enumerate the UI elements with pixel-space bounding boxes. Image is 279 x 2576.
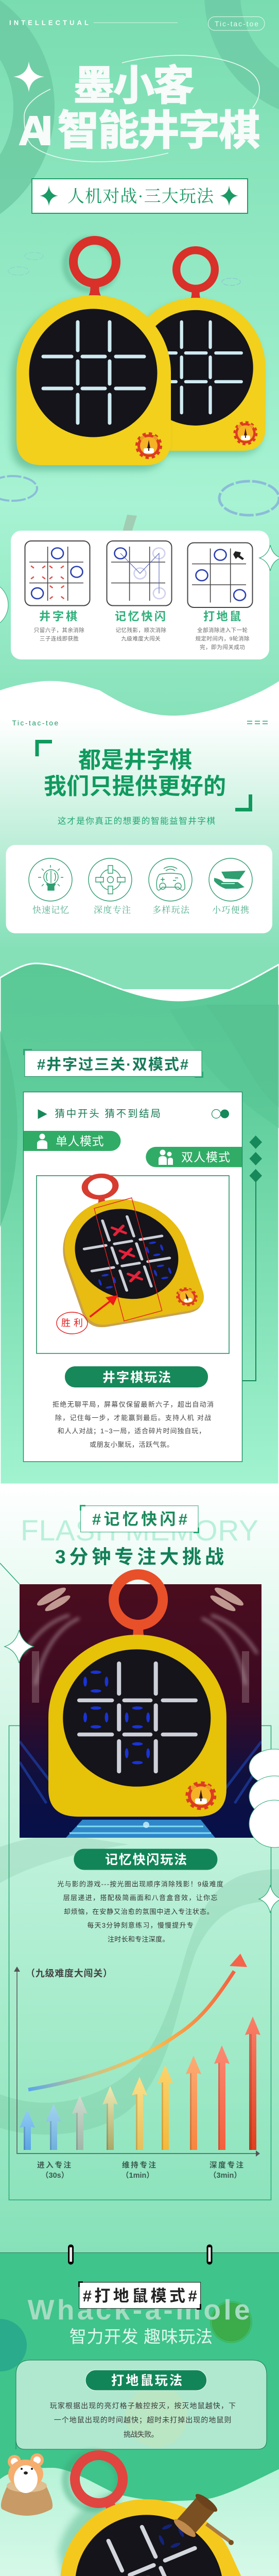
- photo: tilted board with winning line: [37, 1174, 229, 1353]
- icon: flash memory diagram: [107, 541, 172, 606]
- heading: 3分钟专注大挑战: 3分钟专注大挑战: [55, 1547, 224, 1567]
- button: 井字棋玩法: [65, 1366, 208, 1387]
- timeline decoration: [242, 1136, 262, 1381]
- axis labels: [37, 2161, 244, 2180]
- section: intro background wave: [0, 681, 279, 989]
- title: 墨小客 AI智能井字棋: [19, 63, 260, 154]
- text: tic-tac-toe rules: 拒绝无聊平局，屏幕仅保留最新六子，超出自动消: [53, 1400, 214, 1409]
- product photo: front game board: [11, 240, 171, 470]
- button: 打地鼠玩法: [85, 2370, 207, 2391]
- button: 打地鼠玩法: 打地鼠玩法: [111, 2374, 182, 2388]
- text: mode descriptions: 只留六子，其余消除: [34, 626, 84, 634]
- text: flash memory rules: 注时长和专注深度。: [108, 1935, 169, 1943]
- icon: toggle: [212, 1110, 229, 1118]
- pill: Tic-tac-toe: [208, 16, 265, 30]
- tag: 井字过三关·双模式: [23, 1049, 203, 1078]
- section: tic-tac-toe mode background: [0, 963, 279, 1484]
- text: flash memory rules: 光与影的游戏---按光圈出现顺序消除残影！9级难度: [57, 1880, 223, 1888]
- text: mode descriptions: 规定时间内，9轮消除: [196, 635, 250, 642]
- photo: arcade background: [20, 1584, 261, 1838]
- text: rules: [50, 2402, 236, 2438]
- ghost text: FLASH MEMORY: FLASH MEMORY: [21, 1514, 258, 1547]
- light wave stage: [0, 2468, 279, 2576]
- illustration: hamster in pot: [1, 2453, 53, 2516]
- icon: white sparkle: [13, 61, 44, 92]
- text: rules: 玩家根据出现的亮灯格子触控按灭，按灭地鼠越快，下: [50, 2402, 236, 2410]
- text: flash memory rules: [57, 1880, 223, 1943]
- text: tagline: 猜中开头 猜不到结局: [55, 1108, 161, 1120]
- chart title: （九级难度大闯关）: [26, 1968, 112, 1978]
- tag: 打地鼠模式: [78, 2281, 201, 2310]
- axis labels: （1min）: [121, 2171, 154, 2180]
- tag: 记忆快闪: [80, 1505, 199, 1533]
- pill: 单人模式: 单人模式: [56, 1134, 104, 1148]
- text: rules: 挑战失败。: [124, 2430, 159, 2438]
- text: mode descriptions: 三子连线即获胜: [40, 635, 79, 642]
- ghost text: Whack-a-mole: Whack-a-mole: [28, 2294, 250, 2326]
- text: flash memory rules: 每天3分钟刻意练习，慢慢提升专: [87, 1922, 194, 1929]
- axis labels: （30s）: [41, 2171, 68, 2180]
- icon: hand holding device: [209, 858, 252, 901]
- panel: tic-tac-toe card: [24, 1092, 242, 1462]
- axis labels: 进入专注: [37, 2161, 71, 2170]
- product photo: rear game board: [124, 250, 266, 455]
- icon: tic-tac-toe diagram: [25, 541, 90, 606]
- text: Tic-tac-toe label: Tic-tac-toe: [12, 719, 58, 727]
- decorative side bump and sparkle: [0, 545, 279, 629]
- text: tic-tac-toe rules: 除，记住每一步，才能赢到最后。支持人机 对战: [55, 1414, 211, 1422]
- pill: 双人模式: 双人模式: [181, 1150, 230, 1164]
- text: mode descriptions: 完，即为闯关成功: [200, 644, 245, 650]
- heading with brackets: [35, 740, 252, 811]
- subheading: 这才是你真正的想要的智能益智井字棋: [58, 816, 215, 826]
- heading with brackets: 我们只提供更好的: [44, 774, 226, 799]
- level arrows: [20, 2016, 260, 2150]
- clips: [71, 2247, 210, 2262]
- top label: INTELLECTUAL: INTELLECTUAL: [9, 19, 89, 27]
- decorative swoosh around title: [24, 55, 259, 162]
- growth curve arrow: [28, 1954, 247, 2090]
- photo: tilted board with winning line: 胜利: [61, 1318, 83, 1328]
- icon: play triangle: [38, 1109, 47, 1119]
- labels: mode names: 井字棋: [39, 610, 77, 623]
- text: tic-tac-toe rules: [53, 1400, 214, 1449]
- text: mode descriptions: 九级难度大闯关: [121, 635, 161, 642]
- frame around memory block: [0, 1563, 271, 2200]
- pill: 单人模式: [24, 1131, 121, 1151]
- tag: 记忆快闪: #记忆快闪#: [92, 1511, 187, 1528]
- panel: four feature icons: [6, 845, 272, 934]
- product: whack-a-mole board: [31, 2448, 275, 2576]
- subheading: 智力开发 趣味玩法: 智力开发 趣味玩法: [69, 2327, 213, 2346]
- labels: mode names: [39, 610, 241, 623]
- axis labels: （3min）: [209, 2171, 241, 2180]
- section: hero background: [0, 0, 279, 721]
- icon: whack-a-mole diagram: [187, 543, 252, 607]
- button: 记忆快闪玩法: [74, 1849, 217, 1870]
- text: flash memory rules: 却烦恼，在安静又治愈的氛围中进入专注状态。: [64, 1908, 214, 1916]
- labels: mode names: 打地鼠: [203, 610, 241, 623]
- chart: nine-level difficulty: [14, 1954, 260, 2180]
- text: tic-tac-toe rules: 和人人对战；1~3一局，适合碎片时间独自玩，: [58, 1427, 205, 1435]
- heading with brackets: 都是井字棋: [78, 748, 192, 773]
- labels: features: 深度专注: [94, 905, 131, 915]
- icon: game controller: [149, 858, 192, 901]
- button: 记忆快闪玩法: 记忆快闪玩法: [105, 1853, 187, 1867]
- section: whack-a-mole background: [0, 2252, 279, 2576]
- text: flash memory rules: 层层递进，搭配极简画面和八音盒音效，让你忘: [63, 1894, 217, 1902]
- panel: three game modes: [11, 531, 269, 659]
- panel: whack-a-mole rules: [16, 2360, 267, 2449]
- labels: features: 小巧便携: [212, 905, 249, 915]
- axes: [14, 1967, 260, 2157]
- labels: features: 多样玩法: [152, 905, 190, 915]
- axis labels: 维持专注: [122, 2161, 156, 2170]
- tag: 井字过三关·双模式: #井字过三关·双模式#: [37, 1056, 188, 1073]
- title: 墨小客 AI智能井字棋: 智能井字棋: [58, 108, 260, 154]
- section: flash memory background: [0, 1484, 279, 2253]
- decorative dashed rings: [0, 252, 279, 515]
- pill: Tic-tac-toe: Tic-tac-toe: [215, 20, 258, 28]
- pill: 双人模式: [146, 1147, 242, 1167]
- mark: three equals: [247, 721, 268, 724]
- title: 墨小客 AI智能井字棋: 墨小客: [74, 63, 194, 109]
- banner: 人机对战·三大玩法: [32, 179, 248, 213]
- banner: 人机对战·三大玩法: 人机对战·三大玩法: [67, 187, 214, 206]
- icon: brain bulb: [29, 858, 72, 901]
- text: mode descriptions: [34, 626, 250, 650]
- axis labels: 深度专注: [210, 2161, 244, 2170]
- text: mode descriptions: 全部消除进入下一轮: [197, 626, 248, 634]
- text: rules: 一个地鼠出现的时间越快；超时未打掉出现的地鼠则: [54, 2416, 231, 2425]
- text: tic-tac-toe rules: 或朋友小聚玩，活跃气氛。: [90, 1440, 173, 1449]
- button: 井字棋玩法: 井字棋玩法: [102, 1370, 171, 1385]
- labels: features: [32, 905, 249, 915]
- icon: hammer on board: [172, 2492, 234, 2545]
- labels: features: 快速记忆: [32, 905, 69, 915]
- text: mode descriptions: 记忆残影，顺次消除: [115, 626, 167, 634]
- title: 墨小客 AI智能井字棋: AI: [19, 108, 53, 154]
- icon: target: [89, 858, 132, 901]
- tag: 打地鼠模式: #打地鼠模式#: [83, 2287, 197, 2305]
- product: memory board: [48, 1574, 226, 1817]
- labels: mode names: 记忆快闪: [115, 610, 166, 623]
- decorative sparkles and clouds: [5, 1630, 279, 1913]
